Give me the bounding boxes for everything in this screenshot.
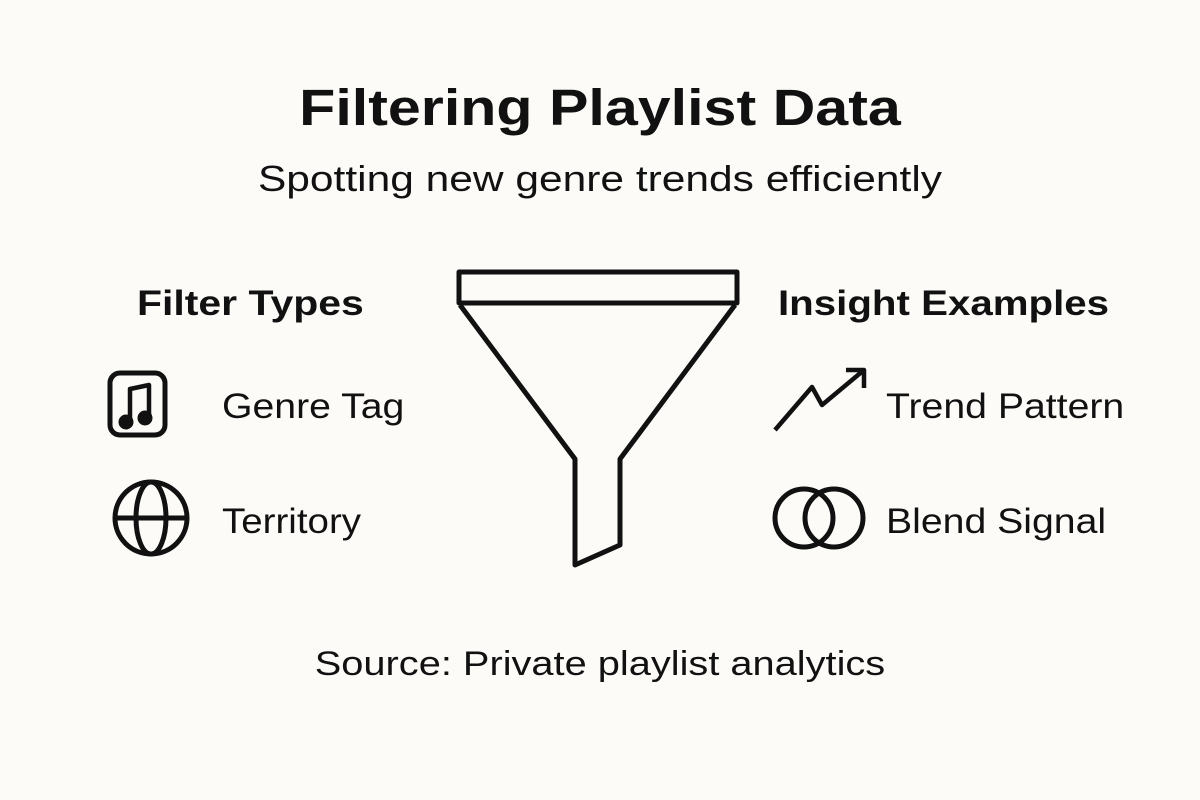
icon: blend circles (775, 489, 863, 547)
icon: globe (115, 482, 187, 554)
icon: music note (110, 373, 165, 435)
source: Source: Private playlist analytics (315, 645, 885, 683)
title: Filtering Playlist Data (299, 79, 901, 136)
label: blend signal: Blend Signal (886, 502, 1106, 541)
funnel (459, 272, 737, 565)
subtitle: Spotting new genre trends efficiently (258, 158, 942, 199)
icon: trend arrow (775, 370, 864, 430)
heading: filter types: Filter Types (137, 284, 364, 323)
label: territory: Territory (222, 502, 361, 541)
label: trend pattern: Trend Pattern (886, 387, 1124, 426)
heading: insight examples: Insight Examples (778, 284, 1109, 323)
label: genre tag: Genre Tag (222, 387, 404, 426)
